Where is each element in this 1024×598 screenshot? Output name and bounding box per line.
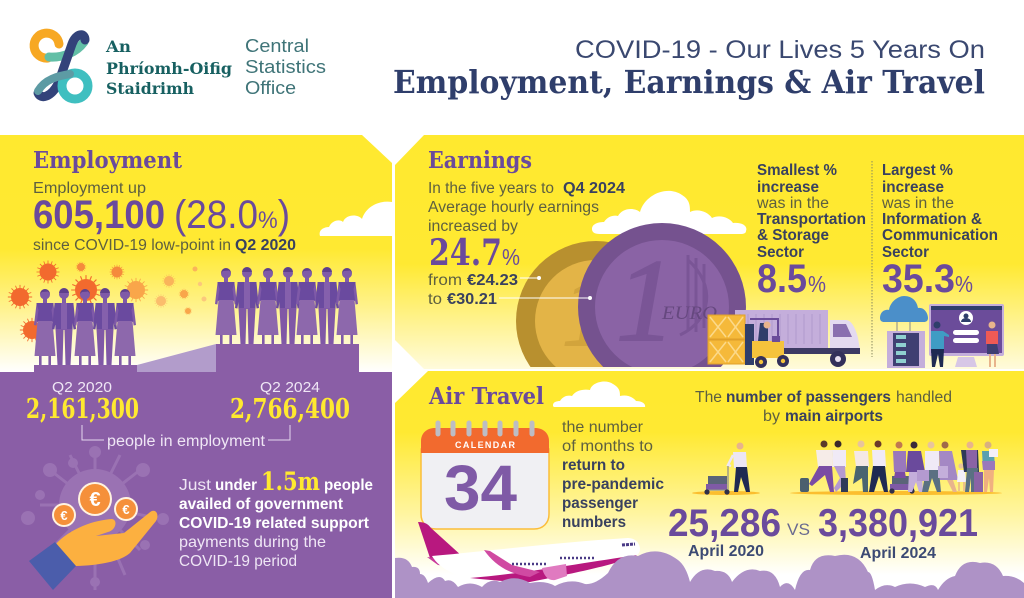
- people: single passenger April 2020: [692, 442, 760, 495]
- heading: Employment: Employment: [33, 147, 182, 174]
- text: from €24.23 to €30.21: €30.21: [447, 291, 497, 308]
- walker 4: [869, 440, 888, 492]
- text: largest increase: Information &: [882, 211, 982, 228]
- stat: 3,380,921 April 2024: [818, 502, 978, 562]
- text: since low-point: since COVID-19 low-point in: [33, 237, 231, 254]
- stat: 605,100 (28.0%): 605,100: [33, 193, 165, 237]
- text: smallest increase: increase: [757, 179, 819, 196]
- stat: Q2 2024: [230, 379, 350, 425]
- walker 6: [906, 442, 925, 492]
- icon: hand with euro coins: €: [122, 502, 130, 517]
- text: employment up: Employment up: [33, 180, 146, 197]
- text: support payments: availed of government: [179, 496, 344, 513]
- icon: euro coins: EURO: [661, 303, 717, 324]
- chart: pedestals: [34, 344, 359, 372]
- calendar rings: [438, 423, 532, 434]
- stat: 605,100 (28.0%): [33, 193, 290, 237]
- icon: euro coins: [516, 223, 746, 367]
- stat: 8.5%: 8.5: [757, 257, 807, 301]
- walker 1: [800, 440, 834, 492]
- icon: logo mark: [34, 33, 88, 99]
- stat: 3,380,921 April 2024: 3,380,921: [818, 502, 978, 545]
- text: months to return: the number: [562, 419, 644, 436]
- text: months to return: passenger: [562, 495, 638, 512]
- leader lines: [499, 276, 592, 300]
- heading: Air Travel: Air Travel: [428, 383, 544, 410]
- icon: hand with euro coins: €: [89, 489, 101, 511]
- text: number of passengers: main airports: [785, 408, 883, 425]
- text: number of passengers: handled: [896, 389, 952, 406]
- bracket: people in employment: [82, 425, 290, 450]
- text: support payments: COVID-19 related support: [179, 515, 370, 532]
- text: earnings intro: increased by: [428, 218, 518, 235]
- text: support payments: payments during the: [179, 534, 326, 551]
- panel: employment: [0, 135, 392, 598]
- people: Q2 2024 group: [215, 267, 358, 344]
- text: earnings intro: Q4 2024: [563, 180, 625, 197]
- text: earnings intro: Average hourly earnings: [428, 199, 599, 216]
- text: months to return: of months to: [562, 438, 653, 455]
- stat: 8.5%: %: [808, 271, 826, 297]
- text: largest increase: Sector: [882, 244, 929, 261]
- text: largest increase: was in the: [881, 195, 954, 212]
- icon: airplane: [418, 522, 640, 582]
- text: smallest increase: [756, 162, 866, 261]
- icon: euro coins: 1: [616, 235, 675, 366]
- stat: 35.3%: %: [955, 271, 973, 297]
- text: support payments: under: [215, 477, 257, 494]
- text: from €24.23 to €30.21: €24.23: [467, 272, 518, 289]
- virus background: [21, 446, 169, 590]
- text: English office name: Office: [245, 77, 296, 98]
- stat: 24.7%: %: [502, 244, 520, 270]
- stat: Q2 2020: 2,161,300: [26, 394, 139, 425]
- icon: hand with euro coins: [21, 446, 169, 590]
- panel background: [395, 371, 1024, 598]
- text: English office name: Central: [245, 35, 309, 56]
- walker 9: [961, 442, 983, 492]
- text: support payments: 1.5m: [261, 467, 320, 496]
- people: Q2 2020 group: [34, 288, 136, 365]
- icon: calendar with 34: CALENDAR: [455, 440, 516, 450]
- walker 10: [982, 442, 998, 492]
- panel: earnings: [395, 135, 1024, 369]
- text: English office name: Statistics: [245, 56, 326, 77]
- icon: truck and forklift: [708, 310, 860, 368]
- text: from €24.23 to €30.21: from: [428, 272, 462, 289]
- walker 7: [917, 442, 941, 492]
- text: earnings intro: In the five years to: [428, 180, 554, 197]
- text: from €24.23 to €30.21: [428, 272, 518, 308]
- text: since low-point: Q2 2020: [235, 237, 296, 254]
- text: Irish office name: [105, 37, 232, 98]
- text: support payments: COVID-19 period: [179, 553, 297, 570]
- stat: Q2 2020: Q2 2020: [52, 379, 112, 396]
- trolley: [889, 476, 915, 494]
- stat: 3,380,921 April 2024: April 2024: [860, 545, 936, 562]
- text: support payments: Just: [179, 477, 212, 494]
- child: [957, 463, 966, 491]
- text: support payments: people: [324, 477, 373, 494]
- text: largest increase: [881, 162, 998, 261]
- text: support payments: [179, 467, 373, 570]
- stat: Q2 2024: Q2 2024: [260, 379, 320, 396]
- cloud: [320, 202, 392, 236]
- stat: 605,100 (28.0%): (28.0%): [174, 193, 290, 237]
- walker 2: [832, 440, 848, 492]
- title: [393, 36, 985, 101]
- stat: 35.3%: 35.3: [882, 257, 955, 301]
- stat: Q2 2020: [26, 379, 139, 425]
- text: months to return: [562, 419, 664, 531]
- text: months to return: numbers: [562, 514, 626, 531]
- text: smallest increase: Smallest %: [757, 162, 837, 179]
- stat: 25,286 April 2020: 25,286: [668, 502, 781, 545]
- text: months to return: return to: [562, 457, 625, 474]
- icon: hand with euro coins: €: [60, 508, 68, 523]
- icon: cloud server and computer: [880, 296, 1004, 368]
- text: smallest increase: Sector: [757, 244, 804, 261]
- walker 5: [893, 442, 906, 478]
- text: Irish office name: Staidrimh: [106, 79, 194, 98]
- stat: 24.7%: 24.7: [429, 232, 502, 274]
- text: number of passengers: The: [695, 389, 722, 406]
- text: largest increase: increase: [882, 179, 944, 196]
- text: earnings intro: [428, 180, 625, 235]
- text: Irish office name: Phríomh-Oifig: [106, 59, 232, 78]
- text: smallest increase: & Storage: [757, 227, 829, 244]
- icon: calendar with 34: 34: [444, 452, 517, 524]
- stat: Q2 2024: 2,766,400: [230, 394, 350, 425]
- title: Employment, Earnings & Air Travel: [393, 63, 985, 101]
- panel background: [395, 135, 1024, 369]
- panel: air travel: [395, 371, 1024, 598]
- icon: calendar with 34: [421, 423, 549, 529]
- text: smallest increase: Transportation: [757, 211, 866, 228]
- cloud: [553, 382, 645, 407]
- text: largest increase: Communication: [882, 227, 998, 244]
- panel background: purple: [0, 372, 392, 598]
- icon: euro coins: 1: [562, 256, 612, 367]
- text: VS: VS: [787, 520, 810, 539]
- text: from €24.23 to €30.21: to: [428, 291, 442, 308]
- icons: virus particles: [8, 261, 206, 342]
- text: largest increase: Largest %: [882, 162, 953, 179]
- text: number of passengers: by: [763, 408, 780, 425]
- panel background: yellow: [0, 135, 392, 372]
- people: passenger crowd April 2024: [790, 440, 1002, 495]
- walker 8: [938, 442, 958, 492]
- bracket: people in employment: people in employment: [107, 433, 266, 450]
- text: number of passengers: number of passengers: [726, 389, 891, 406]
- logo: Central Statistics Office: [34, 33, 326, 99]
- clouds: bottom band: [395, 551, 1024, 598]
- title: COVID-19 - Our Lives 5 Years On: [575, 36, 985, 64]
- text: number of passengers: [695, 389, 952, 425]
- walker 3: [853, 440, 869, 492]
- text: smallest increase: was in the: [756, 195, 829, 212]
- text: months to return: pre-pandemic: [562, 476, 664, 493]
- text: English office name: [245, 35, 326, 98]
- cloud: [592, 191, 746, 234]
- heading: Earnings: Earnings: [428, 147, 532, 174]
- text: Irish office name: An: [105, 37, 131, 56]
- stat: 25,286 April 2020: April 2020: [688, 543, 764, 560]
